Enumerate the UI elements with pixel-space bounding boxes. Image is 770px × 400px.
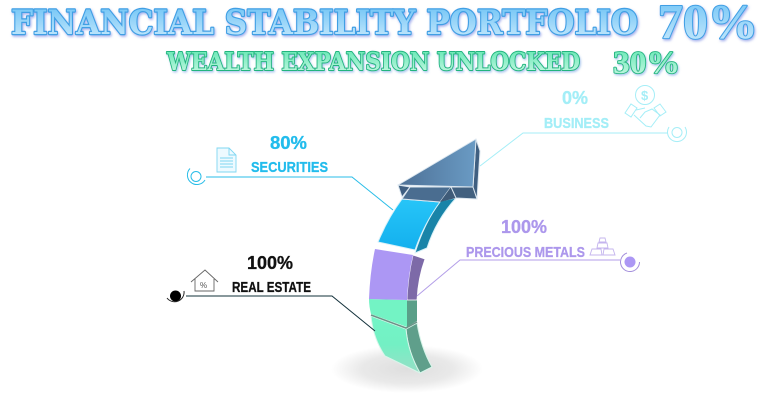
segment: real estate lower	[371, 316, 432, 373]
segment: business arrowhead	[398, 139, 480, 202]
segment: real estate upper	[369, 299, 417, 328]
callout: business	[480, 86, 686, 166]
marker: business	[667, 127, 686, 142]
stat: 30%: 30%	[613, 44, 680, 80]
label: business: BUSINESS	[544, 115, 609, 132]
marker: real estate	[167, 290, 184, 302]
curved arrow chart	[369, 139, 480, 373]
icon: document	[217, 148, 236, 172]
arrow base shadow	[331, 345, 483, 393]
title: financial stability portfolio: FINANCIAL STABILITY PORTFOLIO	[11, 3, 638, 43]
icon: gold bars	[590, 238, 615, 255]
callout: real estate	[167, 253, 375, 331]
label: securities: SECURITIES	[251, 159, 328, 176]
callout: securities	[187, 133, 393, 210]
value: 0%: 0%	[562, 88, 588, 108]
icon: handshake with dollar: $	[641, 88, 649, 103]
value: 80%: 80%	[270, 133, 307, 153]
segment: precious metals	[369, 249, 425, 300]
icon: house	[191, 270, 218, 291]
marker: securities	[187, 168, 205, 185]
value: 100% real estate: 100%	[247, 253, 293, 273]
icon: handshake with dollar	[625, 86, 666, 127]
icon: house: %	[200, 281, 207, 290]
label: precious metals: PRECIOUS METALS	[466, 244, 585, 261]
subtitle: wealth expansion unlocked: WEALTH EXPANSION UNLOCKED	[166, 47, 580, 76]
callout: precious metals	[417, 217, 640, 296]
marker: precious metals	[621, 253, 640, 272]
label: real estate: REAL ESTATE	[232, 279, 311, 296]
value: 100% precious metals: 100%	[501, 217, 547, 237]
segment: securities	[378, 198, 456, 253]
